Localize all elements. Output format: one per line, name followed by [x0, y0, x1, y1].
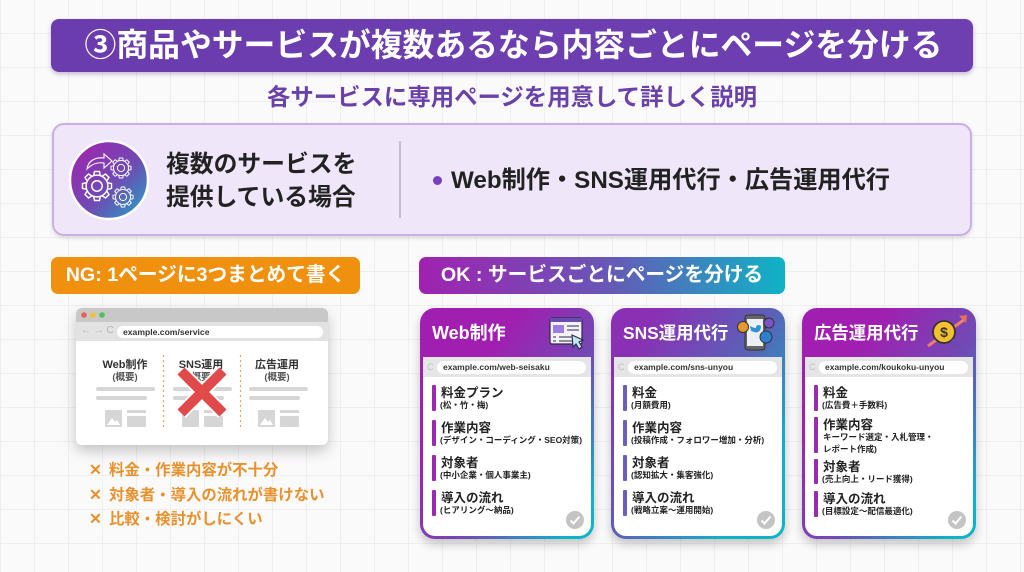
item: price: (月額費用): [631, 400, 671, 410]
column: SNS: SNS運用: [179, 359, 223, 371]
item: price: (松・竹・梅): [440, 400, 488, 410]
card title: 広告運用代行: [814, 323, 918, 343]
item: work: 作業内容: [632, 421, 682, 435]
item: price: [814, 385, 887, 411]
nav arrows: ← → C: [81, 325, 114, 336]
url: example.com/sns-unyou: [634, 362, 733, 372]
item: target: [814, 459, 913, 484]
NG tag: NG: 1ページに3つまとめて書く: [66, 264, 345, 286]
url: [628, 361, 777, 374]
item: target: [432, 455, 531, 481]
icon: check: [948, 511, 966, 529]
item: target: (認知拡大・集客強化): [631, 470, 713, 480]
url: example.com/koukoku-unyou: [825, 362, 944, 372]
item: work: (投稿作成・フォロワー増加・分析): [631, 435, 764, 445]
item: price: (広告費＋手数料): [822, 400, 887, 410]
item: flow: 導入の流れ: [823, 492, 886, 506]
card body: [423, 357, 591, 536]
url strip: [805, 357, 973, 377]
item: flow: (戦略立案〜運用開始): [631, 505, 713, 515]
url pill: example.com/service: [123, 327, 209, 337]
column: Web note: (概要): [112, 372, 138, 383]
reason 3: 比較・検討がしにくい: [109, 511, 263, 528]
item: work: [623, 420, 764, 446]
item: flow: 導入の流れ: [632, 491, 695, 505]
item: work: 作業内容: [441, 421, 491, 435]
item: price: 料金: [632, 386, 657, 400]
window dots: [81, 312, 105, 318]
item: flow: (ヒアリング〜納品): [440, 505, 514, 515]
reason 1: 料金・作業内容が不十分: [109, 462, 278, 479]
reload glyph: C: [427, 362, 434, 372]
icon: check: [566, 511, 584, 529]
item: work: キーワード選定・入札管理・: [823, 432, 934, 442]
icon: check: [757, 511, 775, 529]
card body: [805, 357, 973, 536]
item: price: [623, 385, 671, 411]
item: price: 料金: [823, 386, 848, 400]
item: flow: (目標設定〜配信最適化): [822, 506, 913, 516]
bullet dot: [433, 176, 442, 185]
url strip: [423, 357, 591, 377]
item: flow: [432, 490, 514, 516]
OK tag: [419, 257, 785, 294]
icon: web page with cursor: [549, 317, 584, 350]
reason 2: ✕: [89, 487, 102, 504]
item: price: [432, 385, 504, 411]
item: flow: [814, 491, 913, 517]
card: 広告運用代行: [802, 308, 976, 539]
icon: red cross: [178, 366, 226, 418]
address bar: [76, 322, 328, 341]
item: flow: 導入の流れ: [441, 491, 504, 505]
icon: magnifier with coin and arrow: [927, 315, 967, 350]
case heading: 提供している場合: [166, 184, 356, 211]
item: target: (中小企業・個人事業主): [440, 470, 531, 480]
url strip: [614, 357, 782, 377]
item: work: 作業内容: [823, 418, 873, 432]
item: work: [814, 417, 934, 454]
title bar: [51, 19, 973, 72]
NG tag: [51, 257, 360, 294]
item: work: (デザイン・コーディング・SEO対策): [440, 435, 582, 445]
item: target: (売上向上・リード獲得): [822, 474, 913, 484]
item: target: [623, 455, 713, 481]
item: target: 対象者: [441, 456, 479, 470]
url: example.com/web-seisaku: [443, 362, 550, 372]
item: work: [432, 420, 582, 446]
card title: SNS運用代行: [623, 323, 728, 343]
case heading: [166, 151, 356, 211]
item: price: 料金プラン: [441, 386, 504, 400]
item: flow: [623, 490, 713, 516]
NG reasons: [89, 462, 324, 528]
icon: gears with arrow: [68, 140, 150, 220]
reason 1: ✕: [89, 462, 102, 479]
column: ads note: (概要): [264, 372, 290, 383]
url: [437, 361, 586, 374]
icon: magnifier with coin and arrow: $: [940, 324, 948, 340]
window title bar: [76, 308, 328, 322]
reload glyph: C: [618, 362, 624, 372]
OK tag: OK : サービスごとにページを分ける: [441, 264, 763, 286]
reload glyph: C: [809, 362, 816, 372]
subtitle: 各サービスに専用ページを用意して詳しく説明: [267, 84, 757, 110]
url: [819, 361, 968, 374]
item: target: 対象者: [632, 456, 670, 470]
icon: phone with social badges: [737, 314, 774, 350]
title bar: ③商品やサービスが複数あるなら内容ごとにページを分ける: [85, 27, 942, 63]
card: SNS運用代行: [611, 308, 785, 539]
case heading: 複数のサービスを: [166, 151, 356, 178]
service list: Web制作・SNS運用代行・広告運用代行: [451, 167, 890, 194]
reason 2: 対象者・導入の流れが書けない: [109, 487, 324, 504]
panel: NG browser mockup: [76, 308, 328, 445]
card title: Web制作: [432, 323, 506, 343]
card body: [614, 357, 782, 536]
column: Web: Web制作: [102, 359, 148, 371]
card: Web制作: [420, 308, 594, 539]
reason 3: ✕: [89, 511, 102, 528]
url pill: [117, 326, 323, 338]
column: ads: 広告運用: [255, 359, 299, 371]
divider: [399, 141, 401, 218]
item: work: レポート作成): [823, 444, 877, 454]
column: SNS note: (概要): [188, 372, 214, 383]
panel: case summary: [52, 123, 972, 236]
item: target: 対象者: [823, 460, 861, 474]
placeholder content: [96, 355, 308, 427]
